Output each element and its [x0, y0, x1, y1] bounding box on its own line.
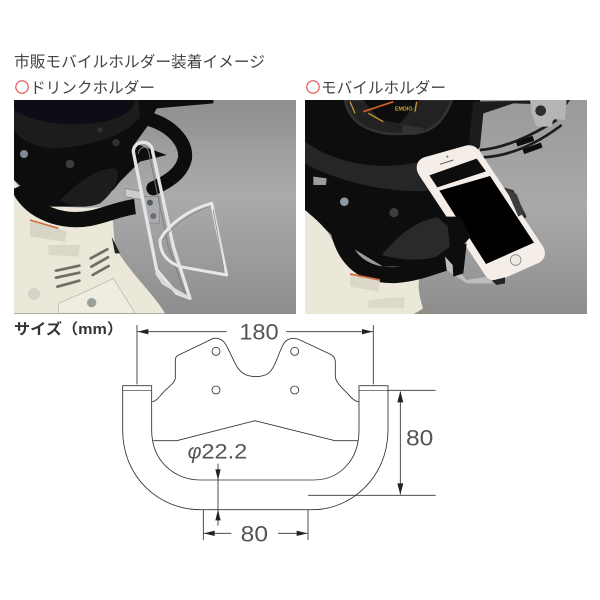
dimension 180: 180 [239, 320, 279, 345]
silver bottle cage [125, 142, 227, 298]
holder bracket [445, 257, 497, 283]
upper right black pipe [150, 119, 185, 188]
lower black frame [305, 197, 458, 267]
black handlebar pipe [338, 230, 460, 275]
holder clamp straps [437, 217, 471, 247]
warning label [30, 220, 67, 242]
heading: size (mm): サイズ（mm） [14, 320, 123, 338]
dimension 80 width: 80 [241, 521, 268, 546]
grey bolts [66, 160, 74, 168]
black inner scoop [60, 168, 118, 207]
dimension diameter 22.2: 22.2 [201, 440, 247, 464]
pipe outline [123, 386, 388, 510]
mounting plate outline [152, 338, 359, 441]
label: mobile holder: モバイルホルダー [321, 79, 446, 97]
photo: mobile holder with smartphone [305, 100, 587, 314]
silver handlebar switch [530, 100, 567, 127]
handlebar cables and grip [480, 120, 557, 150]
dimension 80 height: 80 [406, 425, 433, 450]
bolts [389, 208, 399, 217]
mounting holes [212, 347, 299, 394]
label: drink holder: ドリンクホルダー [30, 79, 155, 97]
photo: drink holder mounted on scooter [14, 100, 296, 314]
home button [510, 255, 521, 265]
phone upper screen reflection [429, 159, 486, 187]
black frame area [14, 100, 213, 207]
cream body [305, 210, 425, 314]
phone body [417, 145, 545, 281]
inner scoop [382, 217, 450, 260]
cover panel [58, 278, 135, 313]
photo: mobile holder with smartphone: EMDIO [395, 107, 412, 113]
vents [56, 249, 109, 287]
dimension 180 [137, 320, 373, 384]
dimension 80 height [308, 390, 436, 495]
warning label [350, 273, 380, 292]
lower black pipe [18, 187, 135, 220]
phone screen [439, 176, 534, 264]
dark top console [305, 100, 480, 203]
dimension diameter 22.2: φ [188, 440, 202, 464]
cream body [14, 180, 165, 313]
dimension diagram: handlebar bracket [123, 320, 436, 546]
heading: mobile holder mounting image: 市販モバイルホルダー装着イメージ [14, 53, 265, 71]
dimension diameter 22.2 [188, 440, 247, 526]
instrument meter panel [345, 100, 452, 134]
dimension 80 width [203, 510, 308, 546]
